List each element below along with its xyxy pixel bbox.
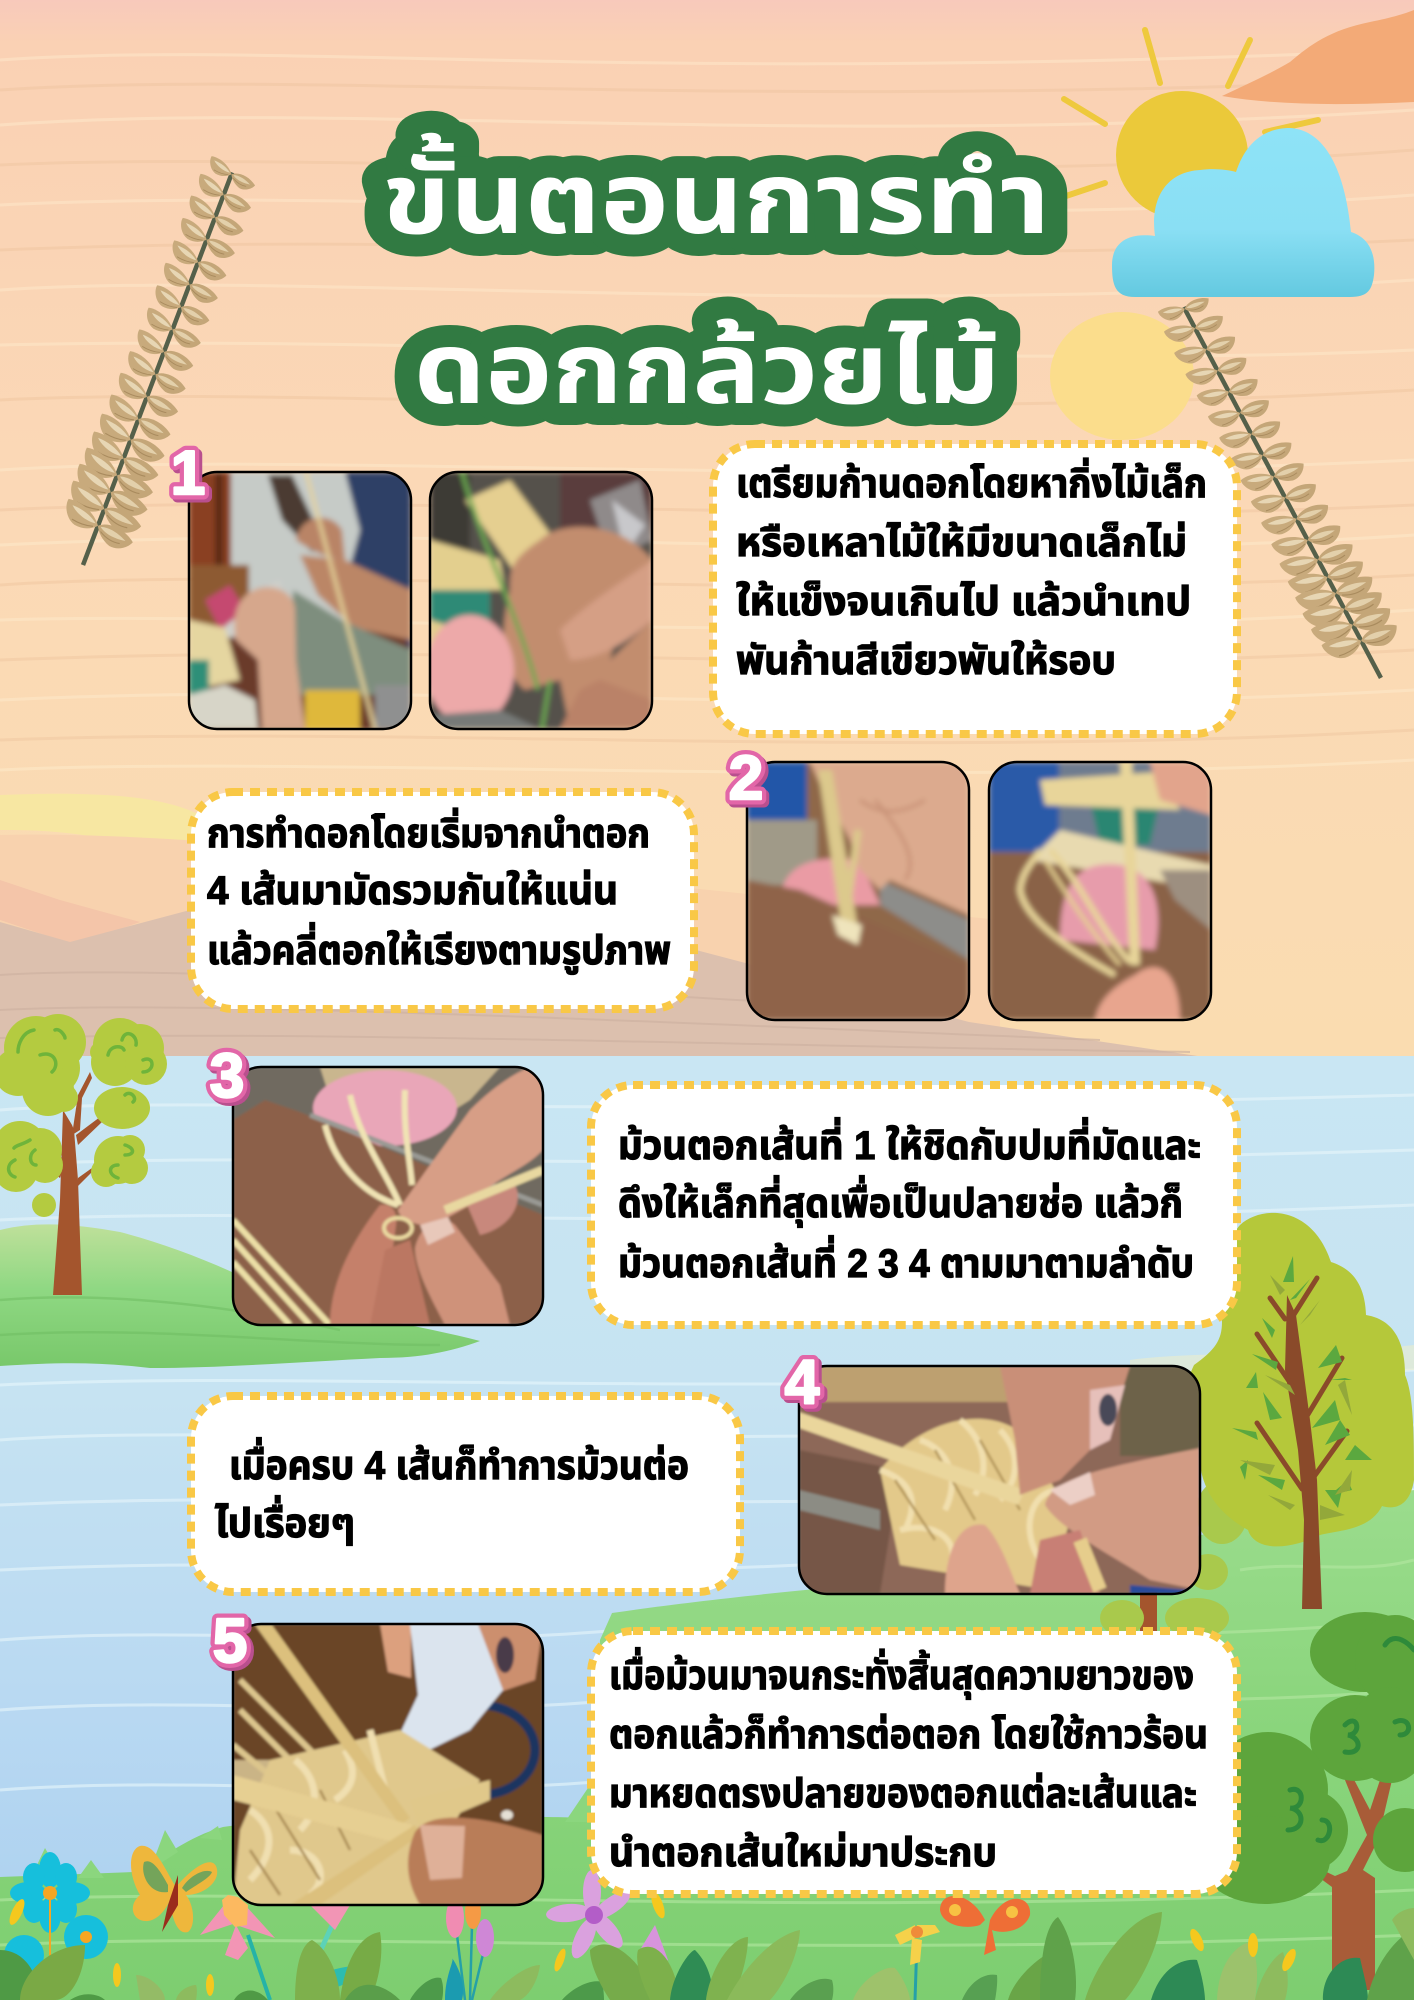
background: yellow paint band [0, 794, 200, 860]
foreground: bottom foliage [0, 1890, 1414, 2000]
icon: yellow flower [895, 1925, 940, 2000]
panel: step 1 text: หรือเหลาไม้ให้มีขนาดเล็กไม่ [736, 520, 1187, 565]
title [382, 132, 1050, 425]
panel: step 4 photo [799, 1366, 1200, 1594]
panel: step 2 text: 4 เส้นมามัดรวมกันให้แน่น [207, 868, 618, 913]
panel: step 2 text [191, 792, 694, 1009]
panel: step 5 text: เมื่อม้วนมาจนกระทั่งสิ้นสุดความยาวของ [609, 1647, 1194, 1700]
panel: step 1 text: ให้แข็งจนเกินไป แล้วนำเทป [736, 579, 1191, 624]
panel: step 3 text: ม้วนตอกเส้นที่ 2 3 4 ตามมาตามลำดับ [618, 1235, 1194, 1286]
icon: step number 2: 2 [729, 744, 763, 813]
icon: step number 5: 5 [216, 1610, 250, 1679]
icon: step number 1: 1 [171, 439, 205, 508]
icon: sun [1063, 30, 1318, 219]
panel: step 3 text [591, 1085, 1237, 1325]
panel: step 2 text: แล้วคลี่ตอกให้เรียงตามรูปภาพ [207, 922, 671, 975]
icon: orange cloud [1222, 10, 1414, 104]
title: ขั้นตอนการทำ [382, 132, 1050, 255]
panel: step 5 text: ตอกแล้วก็ทำการต่อตอก โดยใช้กาวร้อน [609, 1712, 1208, 1757]
panel: step 5 photo [233, 1624, 543, 1905]
icon: yellow paint ball [1050, 312, 1194, 440]
panel: step 1 photos [189, 472, 652, 730]
panel: step 5 text: นำตอกเส้นใหม่มาประกบ [609, 1830, 997, 1875]
panel: step 1 text: เตรียมก้านดอกโดยหากิ่งไม้เล็ก [736, 457, 1207, 506]
icon: step number 3: 3 [213, 1045, 247, 1114]
icon: butterfly yellow green [131, 1846, 217, 1932]
background: left grassy hill [0, 1224, 480, 1368]
icon: step number 5: 5 [213, 1607, 247, 1676]
panel: step 5 text: มาหยดตรงปลายของตอกแต่ละเส้นและ [609, 1771, 1197, 1816]
panel: step 2 text: การทำดอกโดยเริ่มจากนำตอก [207, 807, 650, 856]
background: sand sky [0, 0, 1414, 1070]
panel: step 3 photo [233, 1067, 543, 1325]
background: mountains [0, 835, 1211, 1058]
icon: tulips [446, 1895, 494, 2000]
icon: step number 2: 2 [732, 747, 766, 816]
icon: woven flower spray left [46, 151, 273, 580]
icon: blue cloud [1112, 128, 1374, 297]
panel: step 2 photos [747, 762, 1211, 1020]
icon: step number 4: 4 [785, 1348, 820, 1417]
icon: step number 4: 4 [788, 1351, 823, 1420]
icon: green tree bottom right [1200, 1612, 1414, 1990]
icon: step number 4: 4 [785, 1348, 820, 1417]
icon: step number 3: 3 [210, 1042, 244, 1111]
icon: step number 1: 1 [174, 442, 208, 511]
icon: step number 2: 2 [729, 744, 763, 813]
icon: purple flower [545, 1870, 668, 1978]
icon: step number 3: 3 [210, 1042, 244, 1111]
icon: pink flower [200, 1895, 366, 2000]
panel: step 4 text: ไปเรื่อยๆ [215, 1495, 355, 1546]
panel: step 3 text: ม้วนตอกเส้นที่ 1 ให้ชิดกับปมที่มัดและ [618, 1117, 1201, 1168]
icon: small trees behind photo [1100, 1480, 1248, 1638]
background: water [0, 1056, 1414, 1906]
icon: blue flowers [4, 1852, 108, 1975]
icon: step number 5: 5 [213, 1607, 247, 1676]
panel: step 4 text [191, 1396, 740, 1592]
icon: large tree right [1186, 1213, 1414, 1609]
icon: step number 1: 1 [171, 439, 205, 508]
icon: woven flower spray right [1145, 281, 1414, 696]
icon: orange butterfly [940, 1896, 1030, 1955]
panel: step 4 text: เมื่อครบ 4 เส้นก็ทำการม้วนต่อ [229, 1437, 689, 1488]
panel: step 5 text [591, 1631, 1237, 1894]
title: ดอกกล้วยไม้ [414, 313, 1000, 425]
panel: step 1 text [713, 444, 1237, 734]
background: grass ground [0, 1490, 1414, 2000]
panel: step 3 text: ดึงให้เล็กที่สุดเพื่อเป็นปลายช่อ แล้วก็ [618, 1175, 1183, 1228]
panel: step 1 text: พันก้านสีเขียวพันให้รอบ [736, 638, 1116, 683]
icon: left tree [0, 1014, 167, 1295]
